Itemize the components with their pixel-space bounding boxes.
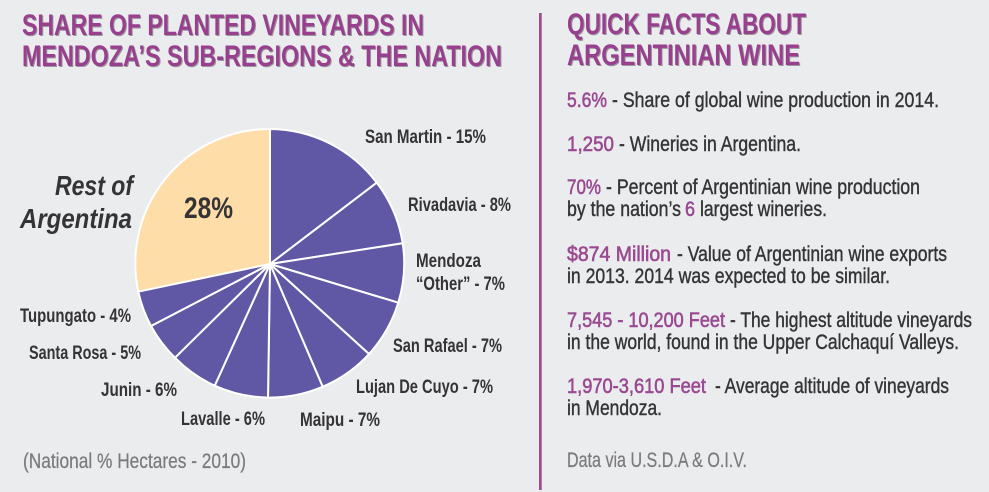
label: Tupungato: Tupungato - 4% (20, 306, 131, 327)
fact: wineries: 1,250 (567, 133, 614, 156)
fact: largest wineries: largest wineries. (700, 198, 827, 221)
pie slice: Maipu 7% (268, 264, 323, 398)
title: vineyard share: MENDOZA’S SUB-REGIONS & THE NATION (22, 40, 502, 73)
pie slice: Lujan De Cuyo 7% (270, 264, 369, 387)
title: quick facts: QUICK FACTS ABOUT (567, 8, 806, 41)
vertical divider (539, 13, 542, 490)
label: 28%: 28% (184, 192, 233, 225)
pie slice: Mendoza Other 7% (270, 243, 404, 303)
title: vineyard share: SHARE OF PLANTED VINEYARDS IN (22, 9, 424, 42)
pie slice: Rivadavia 8% (270, 183, 403, 264)
label: Rivadavia: Rivadavia - 8% (408, 195, 511, 216)
pie slice: San Martin 15% (270, 129, 377, 264)
fact: exports: in 2013. 2014 was expected to be similar. (567, 265, 890, 288)
pie slice: Lavalle 6% (215, 264, 270, 398)
fact: global share: - Share of global wine production in 2014. (612, 89, 939, 112)
label: Mendoza Other (416, 251, 505, 295)
title: vineyard share (22, 9, 502, 73)
fact: exports: $874 Million (567, 243, 671, 266)
fact: highest altitude: 7,545 - 10,200 Feet (567, 309, 725, 332)
label: Junin: Junin - 6% (101, 380, 177, 401)
fact: largest wineries: - Percent of Argentinian wine production (606, 176, 920, 199)
pie slice: Tupungato 4% (138, 264, 270, 326)
label: Rest of Argentina: Argentina (19, 203, 132, 234)
fact: wineries (567, 133, 801, 156)
fact: global share: 5.6% (567, 89, 607, 112)
label: Maipu: Maipu - 7% (300, 410, 380, 431)
fact: largest wineries: 70% (567, 176, 601, 199)
fact: exports (567, 243, 947, 288)
pie chart: planted vineyard share (135, 129, 404, 398)
label: Mendoza Other: “Other” - 7% (416, 274, 505, 295)
pie slice: Junin 6% (175, 264, 270, 386)
fact: largest wineries (567, 176, 920, 221)
fact: largest wineries: by the nation’s (567, 198, 681, 221)
label: San Rafael: San Rafael - 7% (393, 336, 502, 357)
fact: average altitude (567, 375, 949, 420)
title: quick facts: ARGENTINIAN WINE (567, 39, 800, 72)
fact: average altitude: in Mendoza. (567, 397, 662, 420)
fact: average altitude: 1,970-3,610 Feet (567, 375, 706, 398)
pie slice: rest of Argentina 28% (135, 129, 270, 292)
pie slice: Santa Rosa 5% (151, 264, 270, 358)
label: Rest of Argentina (19, 170, 135, 234)
pie slice: San Rafael 7% (270, 264, 398, 354)
label: Lujan De Cuyo: Lujan De Cuyo - 7% (356, 377, 493, 398)
source note: Data via U.S.D.A & O.I.V. (567, 449, 747, 472)
fact: average altitude: - Average altitude of vineyards (715, 375, 949, 398)
label: Santa Rosa: Santa Rosa - 5% (29, 343, 141, 364)
label: Rest of Argentina: Rest of (55, 170, 135, 201)
label: San Martin: San Martin - 15% (365, 127, 486, 148)
chart note: (National % Hectares - 2010) (23, 450, 246, 473)
fact: highest altitude (567, 309, 972, 354)
title: quick facts (567, 8, 806, 72)
label: Lavalle: Lavalle - 6% (181, 409, 265, 430)
fact: largest wineries: 6 (685, 198, 695, 221)
fact: wineries: - Wineries in Argentina. (619, 133, 801, 156)
label: Mendoza Other: Mendoza (416, 251, 481, 272)
